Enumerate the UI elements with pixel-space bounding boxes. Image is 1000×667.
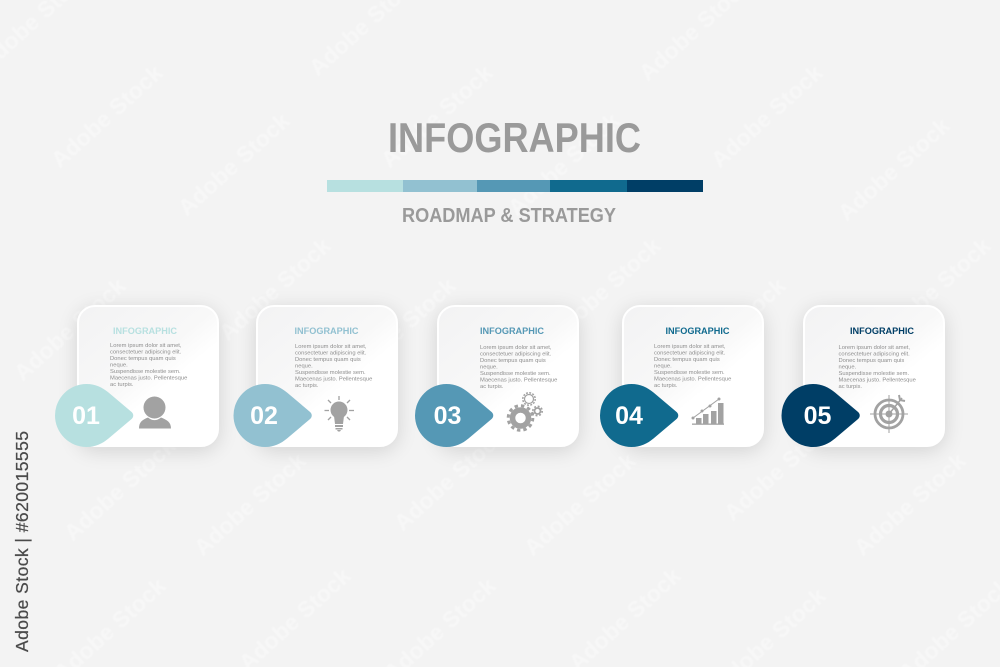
body text 03: Suspendisse molestie sem. (480, 371, 551, 377)
body text 04: Maecenas justo. Pellentesque (654, 376, 731, 382)
watermark pattern: Adobe Stock (669, 272, 791, 386)
body text 02: Donec tempus quam quis (295, 357, 361, 363)
panel: step 01 (55, 306, 219, 451)
watermark pattern: Adobe Stock (503, 107, 625, 221)
number drop 03 (415, 384, 493, 447)
watermark pattern: Adobe Stock (849, 447, 971, 561)
body text 02: consectetuer adipiscing elit. (295, 350, 367, 356)
body text 02: ac turpis. (295, 383, 319, 389)
body text 05: Suspendisse molestie sem. (838, 371, 909, 377)
body text 04: Donec tempus quam quis (654, 357, 720, 363)
body text 01: neque. (110, 362, 128, 368)
five-colour bar (327, 180, 703, 192)
watermark pattern: Adobe Stock (189, 447, 311, 561)
heading 03: INFOGRAPHIC (480, 326, 544, 336)
watermark pattern: Adobe Stock (59, 432, 181, 546)
body text 05: consectetuer adipiscing elit. (838, 352, 910, 358)
body text 01: Suspendisse molestie sem. (110, 369, 181, 375)
body text 01: consectetuer adipiscing elit. (110, 350, 182, 356)
icon: target (870, 395, 908, 433)
body text 03: ac turpis. (480, 384, 504, 390)
subtitle: ROADMAP & STRATEGY (402, 205, 617, 227)
watermark pattern: Adobe Stock (719, 412, 841, 526)
body text 01: ac turpis. (110, 382, 134, 388)
body text 05 (838, 345, 916, 390)
body text 02: Suspendisse molestie sem. (295, 370, 366, 376)
watermark pattern: Adobe Stock (214, 232, 336, 346)
body text 05: Lorem ipsum dolor sit amet, (838, 345, 910, 351)
watermark pattern: Adobe Stock (706, 59, 828, 173)
body text 04: consectetuer adipiscing elit. (654, 350, 726, 356)
icon: gears (508, 393, 542, 430)
heading 02: INFOGRAPHIC (294, 326, 359, 336)
body text 01: Lorem ipsum dolor sit amet, (110, 343, 182, 349)
heading 05: INFOGRAPHIC (850, 326, 914, 336)
panel: step 02 (234, 306, 398, 451)
watermark pattern: Adobe Stock (339, 272, 461, 386)
watermark pattern: Adobe Stock (173, 107, 295, 221)
number drop 05: 05 (804, 402, 831, 430)
body text 04: Lorem ipsum dolor sit amet, (654, 344, 726, 350)
watermark pattern: Adobe Stock (874, 232, 996, 346)
icon: person (139, 396, 171, 428)
body text 02: Maecenas justo. Pellentesque (295, 376, 372, 382)
number drop 01 (55, 384, 133, 447)
body text 02: Lorem ipsum dolor sit amet, (295, 344, 367, 350)
body text 03 (480, 345, 557, 390)
body text 04: ac turpis. (654, 383, 678, 389)
number drop 04 (600, 384, 678, 447)
body text 02: neque. (295, 364, 313, 370)
body text 05: Donec tempus quam quis (838, 358, 904, 364)
icon: light bulb (324, 396, 354, 432)
body text 01: Donec tempus quam quis (110, 356, 176, 362)
title: INFOGRAPHIC (388, 114, 641, 161)
body text 05: Maecenas justo. Pellentesque (838, 378, 916, 384)
number drop 02: 02 (250, 402, 278, 430)
watermark pattern: Adobe Stock (544, 232, 666, 346)
body text 04: Suspendisse molestie sem. (654, 370, 725, 376)
body text 01 (110, 343, 187, 388)
number drop 01: 01 (72, 402, 100, 430)
number drop 04: 04 (615, 402, 643, 430)
body text 04 (654, 344, 731, 389)
panel: step 05 (782, 306, 945, 451)
body text 02 (295, 344, 372, 389)
stock credit: Adobe Stock | #620015555 (12, 431, 32, 652)
watermark pattern: Adobe Stock (389, 422, 511, 536)
body text 03: Maecenas justo. Pellentesque (480, 378, 557, 384)
number drop 03: 03 (434, 402, 461, 430)
body text 05: neque. (838, 364, 857, 370)
heading 01: INFOGRAPHIC (113, 326, 177, 336)
watermark pattern: Adobe Stock (46, 59, 168, 173)
body text 01: Maecenas justo. Pellentesque (110, 376, 187, 382)
body text 03: neque. (480, 364, 498, 370)
panel: step 03 (415, 306, 579, 451)
body text 03: Lorem ipsum dolor sit amet, (480, 345, 552, 351)
body text 05: ac turpis. (838, 384, 862, 390)
watermark pattern: Adobe Stock (9, 272, 131, 386)
watermark pattern: Adobe Stock (519, 447, 641, 561)
body text 03: consectetuer adipiscing elit. (480, 352, 552, 358)
icon: growth chart (692, 398, 724, 425)
number drop 02 (234, 384, 312, 447)
heading 04: INFOGRAPHIC (666, 326, 730, 336)
watermark pattern: Adobe Stock (376, 59, 498, 173)
watermark pattern: Adobe Stock (833, 112, 955, 226)
body text 03: Donec tempus quam quis (480, 358, 546, 364)
number drop 05 (782, 384, 860, 447)
panel: step 04 (600, 306, 764, 451)
body text 04: neque. (654, 364, 672, 370)
